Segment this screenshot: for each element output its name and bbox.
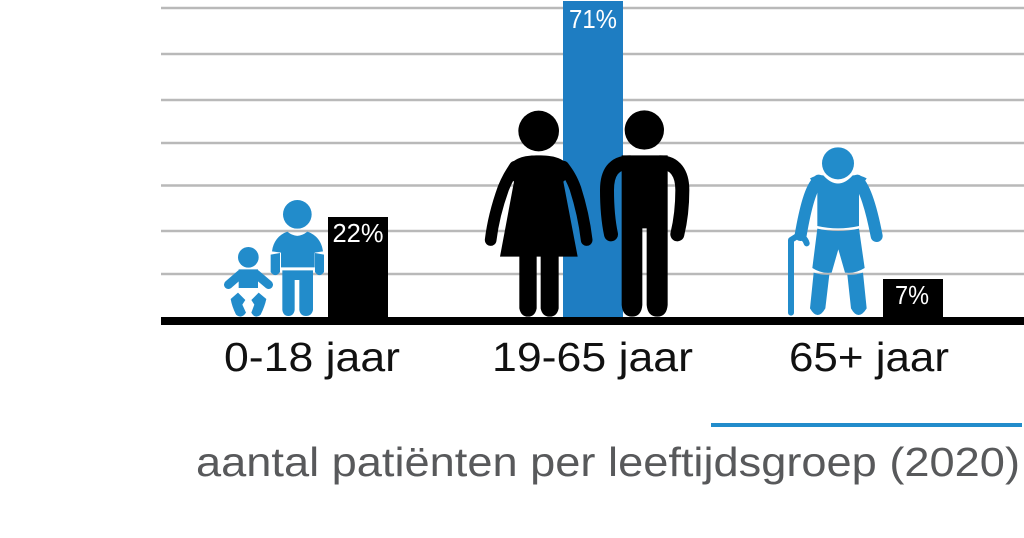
axis baseline (161, 317, 1024, 325)
icon: baby and child (228, 200, 324, 317)
icon: man (607, 110, 682, 317)
bar: 65+ jaar 7%: 7% (895, 280, 929, 310)
label: 0-18 jaar: 0-18 jaar (224, 334, 400, 380)
icon: woman (491, 111, 587, 317)
bar: 0-18 jaar 22% (328, 217, 388, 318)
caption accent line (711, 423, 1022, 427)
icon: elderly person with cane (791, 147, 877, 315)
bar: 0-18 jaar 22%: 22% (332, 218, 384, 248)
bar: 65+ jaar 7% (883, 279, 943, 318)
label: 19-65 jaar: 19-65 jaar (492, 334, 693, 380)
bar: 19-65 jaar 71% (563, 1, 623, 318)
bar: 19-65 jaar 71%: 71% (569, 4, 617, 34)
caption: aantal patiënten per leeftijdsgroep (2020) (196, 439, 1020, 485)
label: 65+ jaar: 65+ jaar (789, 334, 949, 380)
